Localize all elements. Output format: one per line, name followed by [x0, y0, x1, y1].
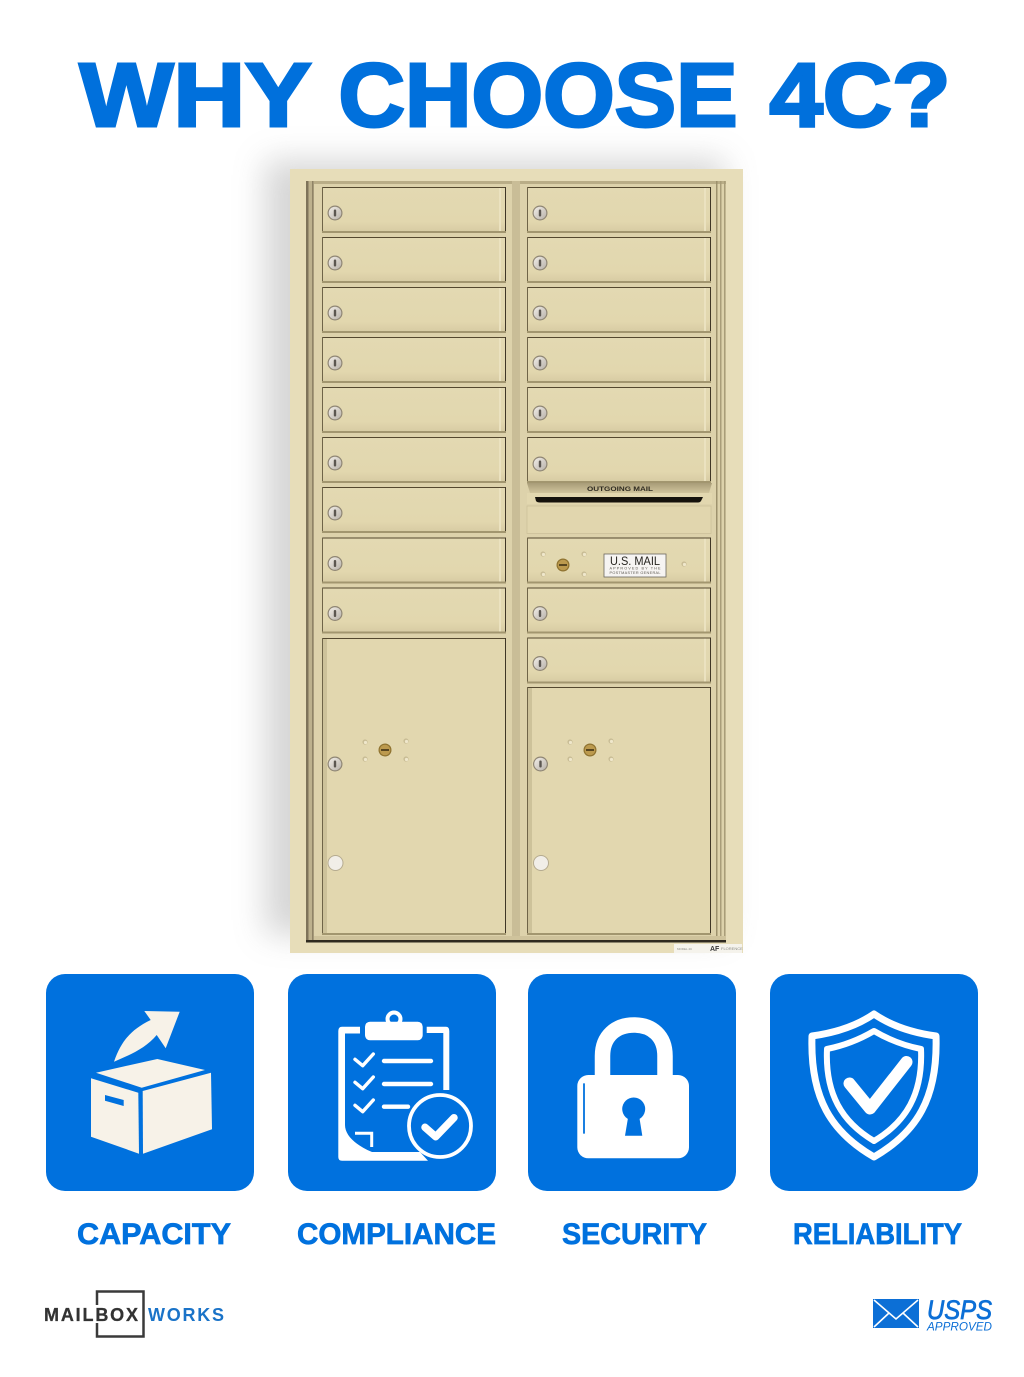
U.S. Mail master door [527, 538, 711, 584]
icon: clipboard with check [338, 1012, 471, 1161]
mailbox cabinet [290, 169, 743, 953]
right parcel door [527, 687, 711, 935]
panel: compliance icon card [288, 974, 496, 1191]
right column of small doors [527, 187, 711, 483]
outgoing mail slot [527, 483, 712, 504]
U.S. Mail label: APPROVED BY THE [610, 566, 661, 570]
label: security: SECURITY [562, 1218, 707, 1251]
logo: USPS Approved: USPS [927, 1295, 992, 1325]
U.S. Mail label: POSTMASTER GENERAL [610, 571, 660, 575]
icon: padlock [577, 1025, 689, 1158]
title [80, 46, 950, 146]
panel: reliability icon card [770, 974, 978, 1191]
label: reliability: RELIABILITY [793, 1218, 962, 1251]
panel: capacity icon card [46, 974, 254, 1191]
manufacturer sticker: FLORENCE [721, 946, 743, 951]
logo: USPS Approved [873, 1295, 992, 1334]
icon: shield with check [812, 1014, 936, 1157]
left column of small doors [322, 187, 506, 634]
logo: Mailbox Works: WORKS [148, 1305, 224, 1325]
cabinet drop shadow [265, 160, 725, 935]
U.S. Mail label: U.S. MAIL [610, 556, 661, 568]
U.S. Mail label [604, 554, 666, 577]
title: WHY [80, 46, 312, 146]
label: compliance: COMPLIANCE [297, 1218, 496, 1251]
title: CHOOSE [338, 46, 738, 146]
lower right small doors [527, 588, 711, 684]
logo: Mailbox Works: MAILBOX [44, 1305, 138, 1325]
manufacturer sticker: MODEL 4C [677, 947, 693, 951]
logo: USPS Approved: APPROVED [926, 1322, 992, 1334]
icon: envelope [873, 1299, 919, 1328]
manufacturer sticker [674, 944, 743, 953]
logo: Mailbox Works [44, 1292, 224, 1336]
title: 4C? [770, 46, 950, 146]
blank panel [527, 506, 711, 534]
icon: box with arrow [91, 1011, 212, 1154]
panel: security icon card [528, 974, 736, 1191]
manufacturer sticker: AF [710, 946, 720, 953]
label: capacity: CAPACITY [77, 1218, 231, 1251]
outgoing mail slot: OUTGOING MAIL [587, 486, 653, 493]
left parcel door [322, 638, 506, 935]
